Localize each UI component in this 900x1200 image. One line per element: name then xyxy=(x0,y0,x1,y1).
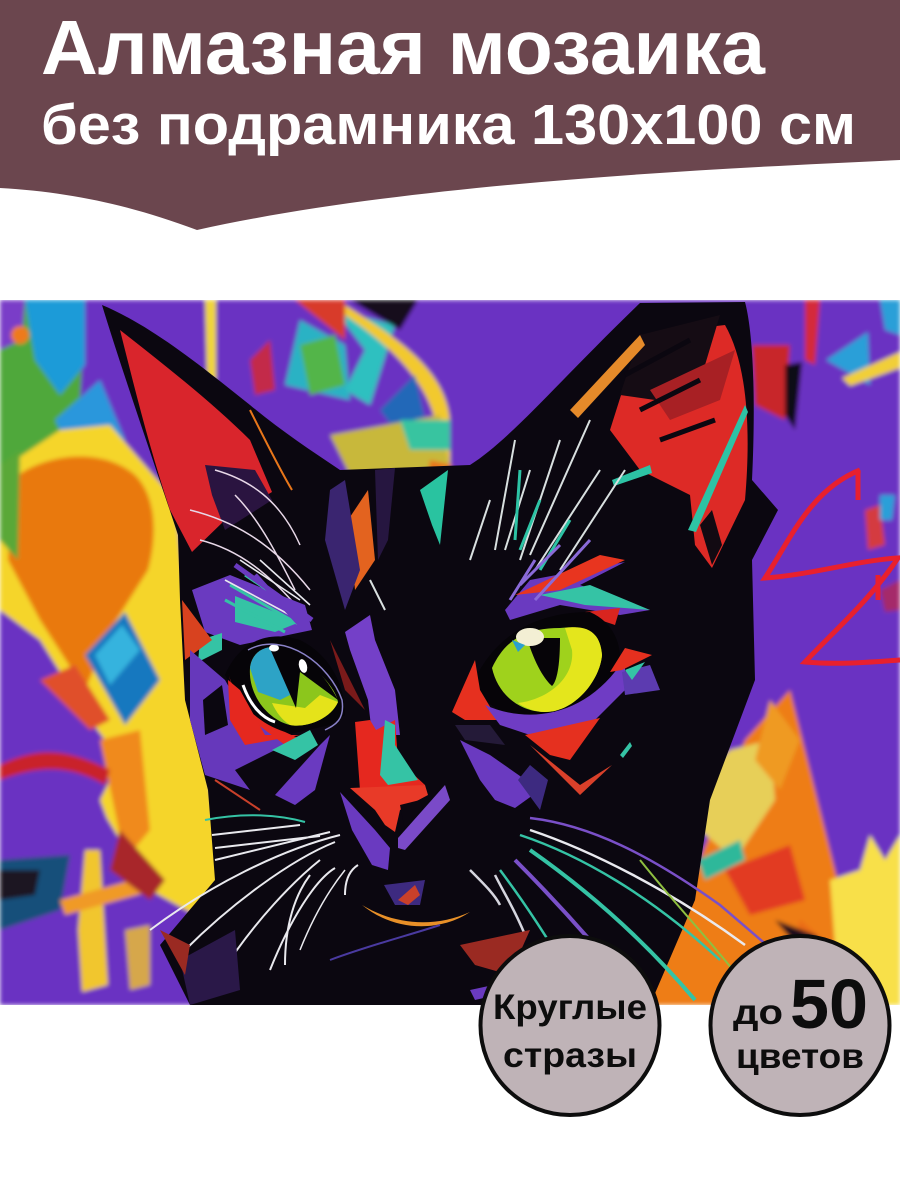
subtitle: без подрамника 130х100 см xyxy=(41,93,856,157)
badge: round rhinestones xyxy=(480,936,660,1115)
badge: up to 50 colours: до xyxy=(733,993,783,1032)
badge: up to 50 colours: цветов xyxy=(736,1037,864,1076)
badge: round rhinestones: стразы xyxy=(503,1036,637,1075)
nose bridge and nose xyxy=(330,615,450,905)
painting: black cat on abstract background xyxy=(0,300,900,1005)
right brow fur xyxy=(505,540,650,625)
cheek marks right xyxy=(455,725,548,810)
header banner xyxy=(0,0,900,230)
badge: up to 50 colours: 50 xyxy=(790,965,868,1043)
cheek marks left xyxy=(190,650,330,810)
badge: round rhinestones: Круглые xyxy=(493,988,647,1027)
left brow fur xyxy=(182,560,312,662)
red graffiti squiggle xyxy=(765,470,900,663)
right ear xyxy=(570,315,748,568)
title: Алмазная мозаика xyxy=(41,5,766,91)
badge: up to 50 colours xyxy=(710,936,890,1115)
cat head silhouette xyxy=(102,302,778,1005)
whiskers left xyxy=(150,815,358,975)
mouth and chin xyxy=(160,905,540,1005)
forehead marks xyxy=(325,420,625,610)
left ear xyxy=(120,330,310,610)
whiskers right xyxy=(470,818,790,1000)
painting background xyxy=(0,300,900,1005)
left eye xyxy=(225,636,345,748)
right eye xyxy=(452,612,660,795)
